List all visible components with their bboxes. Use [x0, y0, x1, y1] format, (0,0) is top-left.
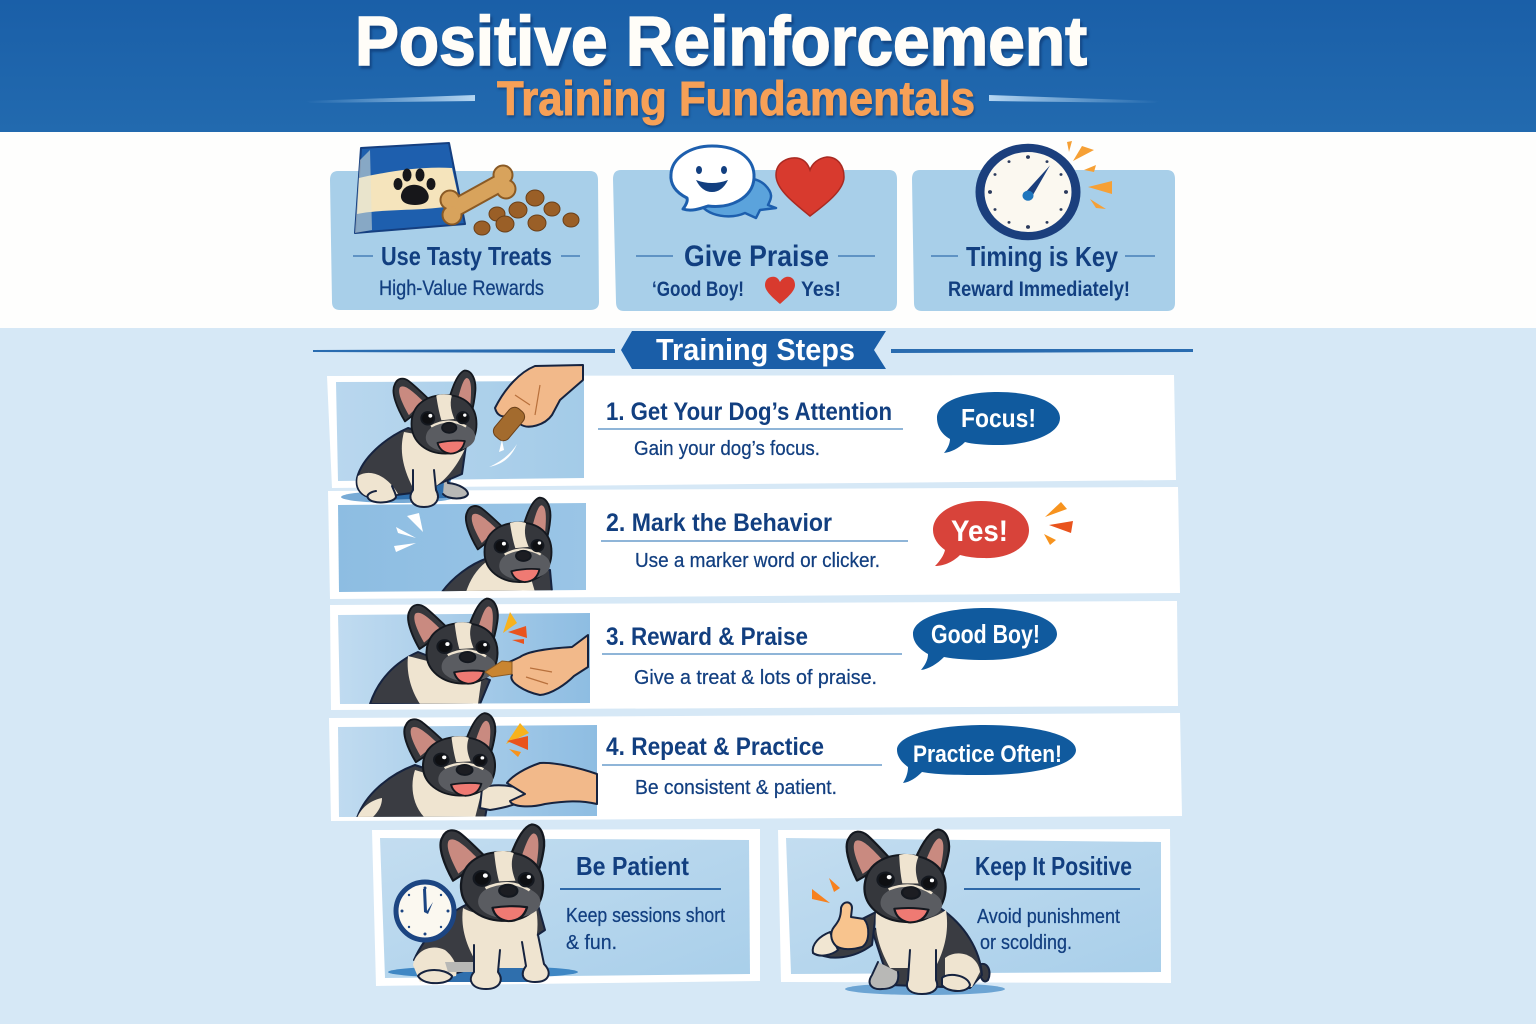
- dog sitting with clock: [388, 820, 578, 989]
- callout: focus: Focus!: [961, 403, 1036, 433]
- callout: yes: Yes!: [951, 515, 1008, 548]
- callout: focus: [937, 392, 1060, 453]
- callout: practice often: Practice Often!: [913, 741, 1062, 768]
- dog head: [466, 498, 552, 582]
- step 3 heading: 3. Reward & Praise: [606, 623, 808, 651]
- panel: keep it positive: [778, 821, 1171, 995]
- row 2: mark the behavior: [328, 487, 1180, 599]
- icon: treat bag: [355, 143, 465, 233]
- caption: reward immediately: Reward Immediately!: [948, 278, 1130, 301]
- keep it positive text: Avoid punishment: [977, 906, 1120, 928]
- icon: hand offering treat: [485, 635, 588, 695]
- icon: burst lines: [394, 513, 423, 552]
- callout: yes: [933, 501, 1029, 566]
- icon: hand holding treat: [489, 365, 583, 467]
- header band: [0, 0, 1536, 132]
- icon: bone: [440, 165, 516, 225]
- icon: timing sparks: [1067, 141, 1112, 209]
- step 4 heading: 4. Repeat & Practice: [606, 733, 824, 761]
- icon: hand holding paw: [507, 763, 597, 806]
- icon: clock: [980, 148, 1076, 236]
- dog sitting: [341, 370, 476, 507]
- section banner: training steps: Training Steps: [656, 332, 855, 367]
- keep it positive heading: Keep It Positive: [975, 851, 1132, 881]
- icon: kibble: [474, 190, 579, 235]
- caption: high-value rewards: High-Value Rewards: [379, 277, 544, 300]
- icon: orange sparks: [1044, 502, 1073, 545]
- keep it positive text: or scolding.: [980, 932, 1072, 954]
- step 1 heading: 1. Get Your Dog’s Attention: [606, 398, 892, 426]
- step 4 text: Be consistent & patient.: [635, 777, 837, 799]
- icon: sparks: [503, 612, 527, 644]
- icon: sparks: [506, 723, 529, 757]
- step 1 text: Gain your dog’s focus.: [634, 438, 820, 460]
- dog head: [406, 596, 500, 685]
- step 3 text: Give a treat & lots of praise.: [634, 667, 877, 689]
- title: Positive Reinforcement: [355, 2, 1087, 80]
- caption: good boy yes: ‘Good Boy!: [652, 278, 744, 301]
- caption: good boy yes: [652, 277, 841, 304]
- row 4: repeat and practice: [329, 711, 1182, 821]
- caption: good boy yes: Yes!: [801, 278, 841, 301]
- dog giving paw: [357, 765, 528, 818]
- heading: use tasty treats: Use Tasty Treats: [381, 241, 552, 271]
- dog thumbs up: [813, 821, 1005, 995]
- subtitle: [305, 73, 1160, 126]
- panel: be patient: [372, 820, 760, 989]
- white band behind tips: [0, 132, 1536, 328]
- row 3: reward and praise: [330, 596, 1178, 710]
- dog eating treat: [370, 652, 490, 704]
- heading: timing is key: Timing is Key: [966, 241, 1118, 272]
- icon: orange sparks: [812, 878, 840, 903]
- keep it positive text: [977, 906, 1120, 954]
- panel: timing is key: [912, 141, 1175, 311]
- callout: good boy: [913, 608, 1057, 670]
- step 2 heading: 2. Mark the Behavior: [606, 509, 832, 537]
- be patient text: Keep sessions short: [566, 905, 725, 927]
- icon: speech bubbles: [671, 146, 776, 218]
- panel: give praise: [613, 146, 897, 311]
- panel: use tasty treats: [330, 143, 599, 310]
- row 1: get your dog's attention: [327, 365, 1176, 507]
- callout: good boy: Good Boy!: [931, 619, 1040, 649]
- be patient text: [566, 905, 725, 954]
- subtitle: Training Fundamentals: [497, 73, 975, 126]
- callout: practice often: [897, 725, 1076, 783]
- be patient text: & fun.: [566, 932, 617, 954]
- heading: give praise: Give Praise: [684, 240, 829, 273]
- icon: heart: [776, 157, 844, 216]
- dog shoulders: [442, 558, 552, 592]
- step 2 text: Use a marker word or clicker.: [635, 550, 880, 572]
- be patient heading: Be Patient: [576, 851, 689, 881]
- dog head: [402, 711, 497, 797]
- section banner: training steps: [313, 331, 1193, 369]
